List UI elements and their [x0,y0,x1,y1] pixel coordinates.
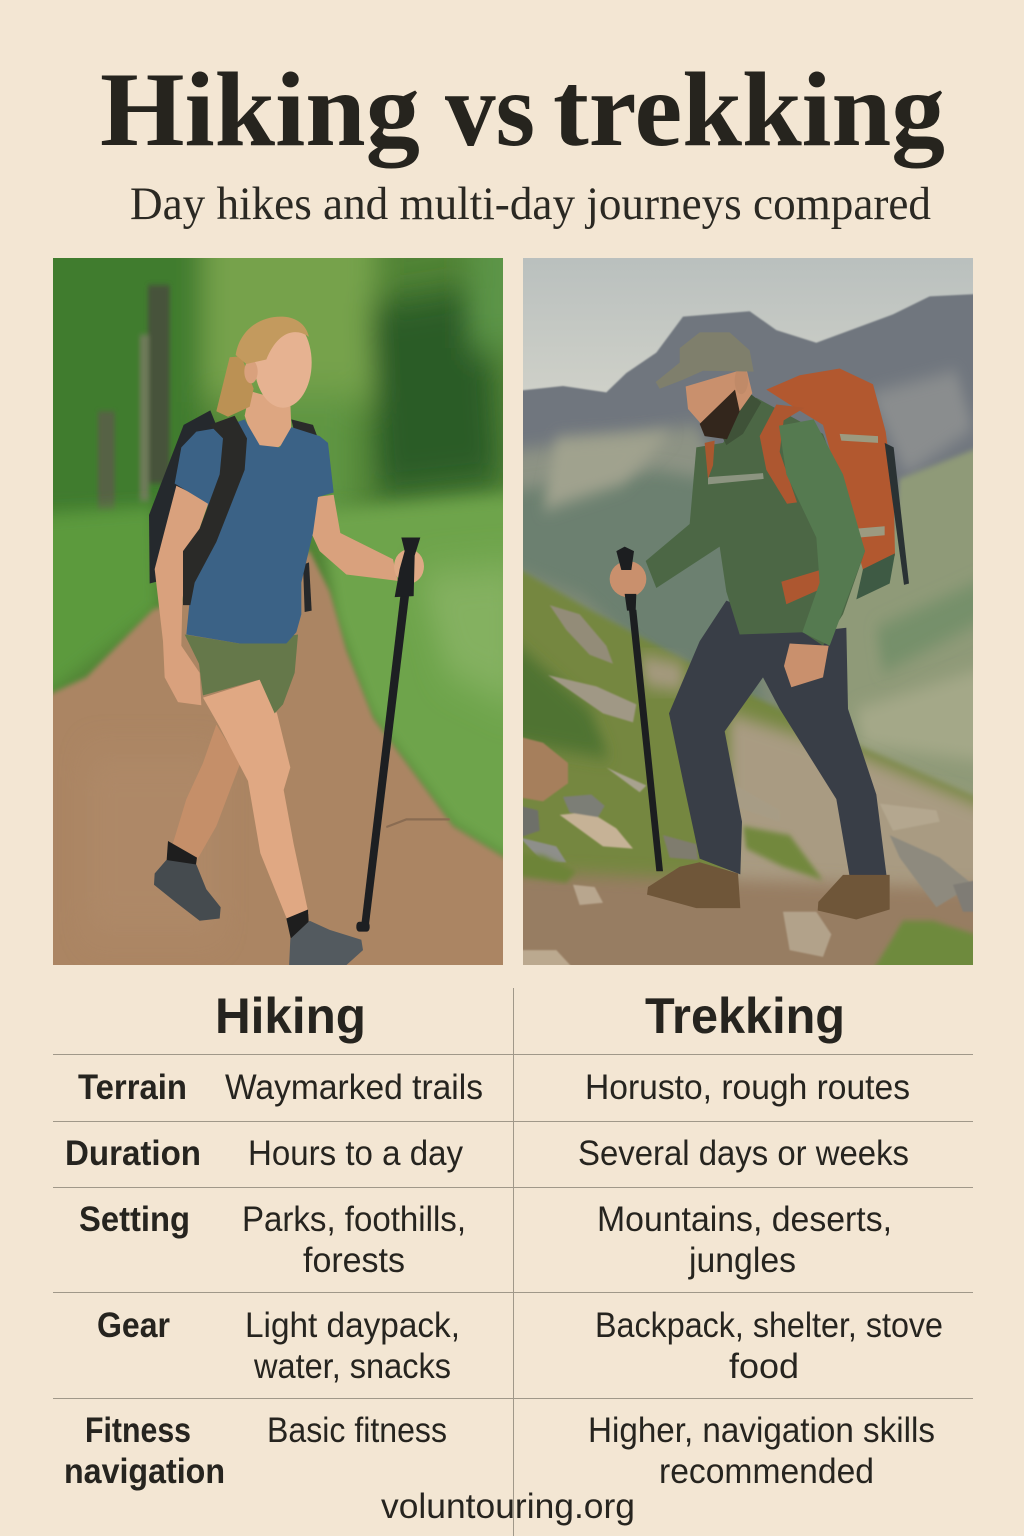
face [254,332,312,408]
row: gear: Backpack, shelter, stove [595,1306,943,1345]
arm left [155,486,209,705]
title: Hiking [100,51,420,168]
shorts [185,634,298,713]
row: setting: jungles [688,1241,796,1280]
trekking pole right [616,547,663,871]
photo: trekker in mountains [523,258,973,965]
hip belt [781,569,823,604]
neck [244,392,292,448]
figure: woman hiker [149,317,424,968]
row: duration: Hours to a day [248,1134,463,1173]
row: fitness and navigation: navigation [64,1452,225,1491]
cap [656,332,754,389]
shoes [154,860,221,921]
boots [647,862,740,908]
row: terrain: Horusto, rough routes [585,1068,910,1107]
row: duration: Several days or weeks [578,1134,909,1173]
row: fitness and navigation: Fitness [85,1411,191,1450]
front leg [203,680,309,922]
row: duration: Duration [65,1134,201,1173]
row: setting: Setting [79,1200,190,1239]
orange backpack [766,368,895,570]
row: gear: Gear [97,1306,170,1345]
comparison table [53,988,973,1536]
near shoulder strap [183,416,247,605]
shirt [175,419,334,644]
row: fitness and navigation [64,1411,935,1491]
row: gear [97,1306,943,1386]
subtitle: Day hikes and multi-day journeys compared [130,178,931,230]
title [100,51,945,168]
row: setting: forests [303,1241,405,1280]
face [686,372,752,423]
backpack [149,410,218,584]
back leg [170,725,240,860]
hand left [610,561,646,597]
trousers [669,601,887,879]
socks [166,841,197,867]
row: fitness and navigation: Higher, navigation skills [588,1411,935,1450]
row: fitness and navigation: recommended [659,1452,874,1491]
arm right [311,495,398,581]
collar [723,393,761,445]
row: setting: Mountains, deserts, [597,1200,892,1239]
title: vs [445,51,535,168]
jacket shoulder strap [760,405,805,504]
beard [700,390,740,439]
row: setting [79,1200,892,1280]
row: gear: food [729,1347,799,1386]
hand right [784,644,829,687]
photo: hiker on forest trail [53,258,503,965]
row: gear: water, snacks [253,1347,451,1386]
figure: male trekker [610,332,909,919]
row: fitness and navigation: Basic fitness [267,1411,447,1450]
source credit: voluntouring.org [381,1487,635,1526]
rocks [516,605,976,968]
chest seam [708,473,764,484]
trekking pole left [356,538,420,932]
row: terrain: Waymarked trails [225,1068,483,1107]
column heading: Trekking: Trekking [645,988,845,1044]
jacket sleeve [779,419,865,646]
row: duration [65,1134,909,1173]
row: terrain [78,1068,910,1107]
row: terrain: Terrain [78,1068,187,1107]
jacket [646,398,865,646]
row: gear: Light daypack, [245,1306,460,1345]
ponytail [216,356,254,417]
column heading: Hiking: Hiking [215,988,366,1044]
hair [236,317,309,364]
title: trekking [553,51,945,168]
row: setting: Parks, foothills, [242,1200,466,1239]
